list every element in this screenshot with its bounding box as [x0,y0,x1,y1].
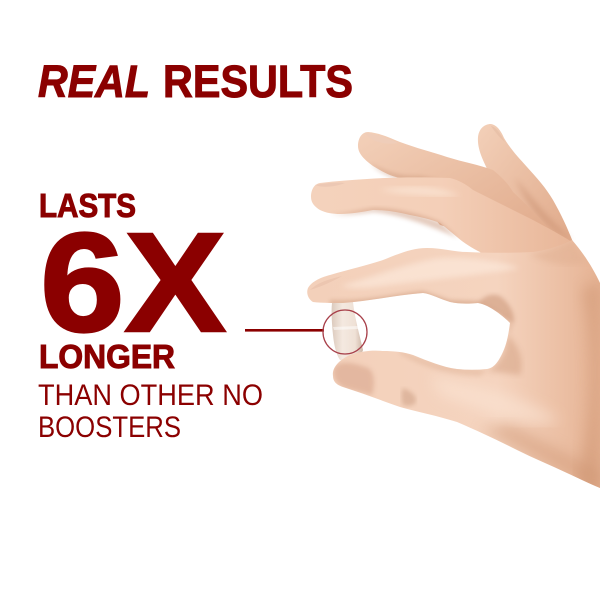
ring finger [358,132,552,250]
leader line [245,329,324,332]
callout: leader line and circle [245,310,367,354]
subtext: than other no boosters: THAN OTHER NO [38,379,263,412]
title: RESULTS [163,56,353,107]
palm and thumb [307,240,600,500]
photo: hand holding capsule [307,124,600,500]
middle finger [311,177,572,262]
big stat: 6X: 6X [40,203,226,361]
capsule [332,302,363,360]
title [38,56,353,107]
text block: lasts 6X longer [38,187,263,444]
callout circle [323,310,367,354]
heading: longer: LONGER [39,338,175,375]
subtext: than other no boosters [38,379,263,444]
subtext: than other no boosters: BOOSTERS [38,411,181,444]
title: REAL [38,56,150,107]
pinky finger [478,124,573,250]
heading: lasts: LASTS [39,187,136,224]
